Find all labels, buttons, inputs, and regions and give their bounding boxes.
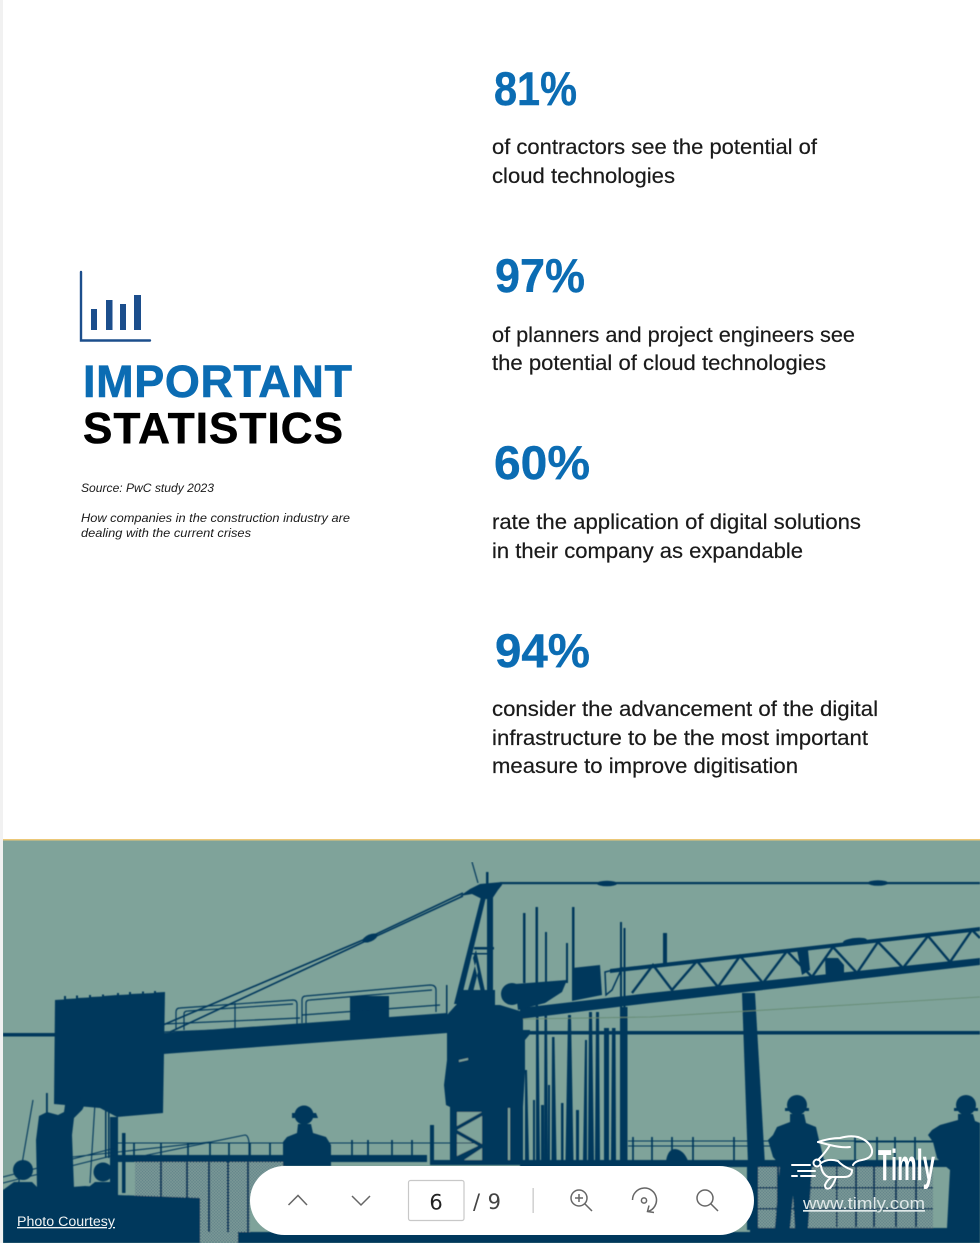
icon: next page chevron — [352, 1196, 370, 1205]
study description: How companies in the construction industry are — [81, 511, 350, 525]
crane: tower top — [361, 872, 502, 1015]
stat: 60% — [492, 436, 861, 563]
worker: centre — [283, 1106, 331, 1166]
stat: 60%: in their company as expandable — [492, 540, 803, 563]
study description — [81, 511, 350, 540]
worker: right one — [768, 1095, 824, 1228]
worker: right two — [928, 1095, 980, 1228]
icon: previous page chevron — [288, 1196, 307, 1205]
scaffold poles — [512, 907, 980, 1230]
stat: 81%: of contractors see the potential of — [492, 136, 817, 159]
silhouette artwork — [3, 862, 980, 1243]
wires — [523, 997, 980, 1019]
photo credit: Photo Courtesy — [17, 1214, 115, 1229]
fence and railings — [3, 1093, 980, 1243]
stat: 81% — [492, 62, 817, 188]
page number box: 6 — [429, 1190, 443, 1214]
page count: / 9 — [473, 1190, 501, 1214]
stat: 94%: infrastructure to be the most important — [492, 727, 868, 750]
title: statistics: STATISTICS — [83, 404, 343, 453]
crane: top wire — [500, 880, 980, 886]
crane: railings and cables — [163, 862, 478, 1032]
stat: 60%: rate the application of digital solutions — [492, 511, 861, 534]
icon: zoom in — [571, 1190, 592, 1211]
stat: 97% — [492, 249, 855, 375]
ground — [3, 1186, 980, 1243]
icon: bar chart — [81, 272, 150, 340]
icon: search — [697, 1190, 718, 1211]
stat: 94% — [492, 624, 878, 778]
page number box — [408, 1180, 464, 1220]
logo: Timly — [792, 1136, 935, 1213]
PDF toolbar — [250, 1166, 754, 1235]
stat: 94%: measure to improve digitisation — [492, 755, 798, 778]
website link: www.timly.com — [802, 1194, 925, 1213]
stat: 97%: 97% — [495, 249, 585, 302]
photo: construction site silhouette — [3, 839, 980, 1243]
study description: dealing with the current crises — [81, 526, 251, 540]
workers: left group — [3, 1097, 116, 1200]
panel: statistics heading — [81, 272, 352, 540]
stat: 97%: the potential of cloud technologies — [492, 352, 826, 375]
crane: tower body — [444, 1005, 530, 1160]
stat: 94%: 94% — [495, 624, 590, 677]
other worker head behind fence — [666, 1149, 688, 1161]
stat: 60%: 60% — [494, 436, 590, 489]
stat: 94%: consider the advancement of the digital — [492, 698, 878, 721]
icon: rotate — [632, 1188, 657, 1212]
title: important: IMPORTANT — [83, 356, 352, 407]
stat: 81%: cloud technologies — [492, 165, 675, 188]
icon: flying rabbit — [792, 1136, 872, 1189]
stat: 97%: of planners and project engineers see — [492, 324, 855, 347]
crane: counterweight and jib — [3, 991, 447, 1117]
source line: Source: PwC study 2023 — [81, 481, 214, 495]
stat: 81%: 81% — [494, 62, 577, 115]
crane: truss arm — [501, 927, 980, 1019]
